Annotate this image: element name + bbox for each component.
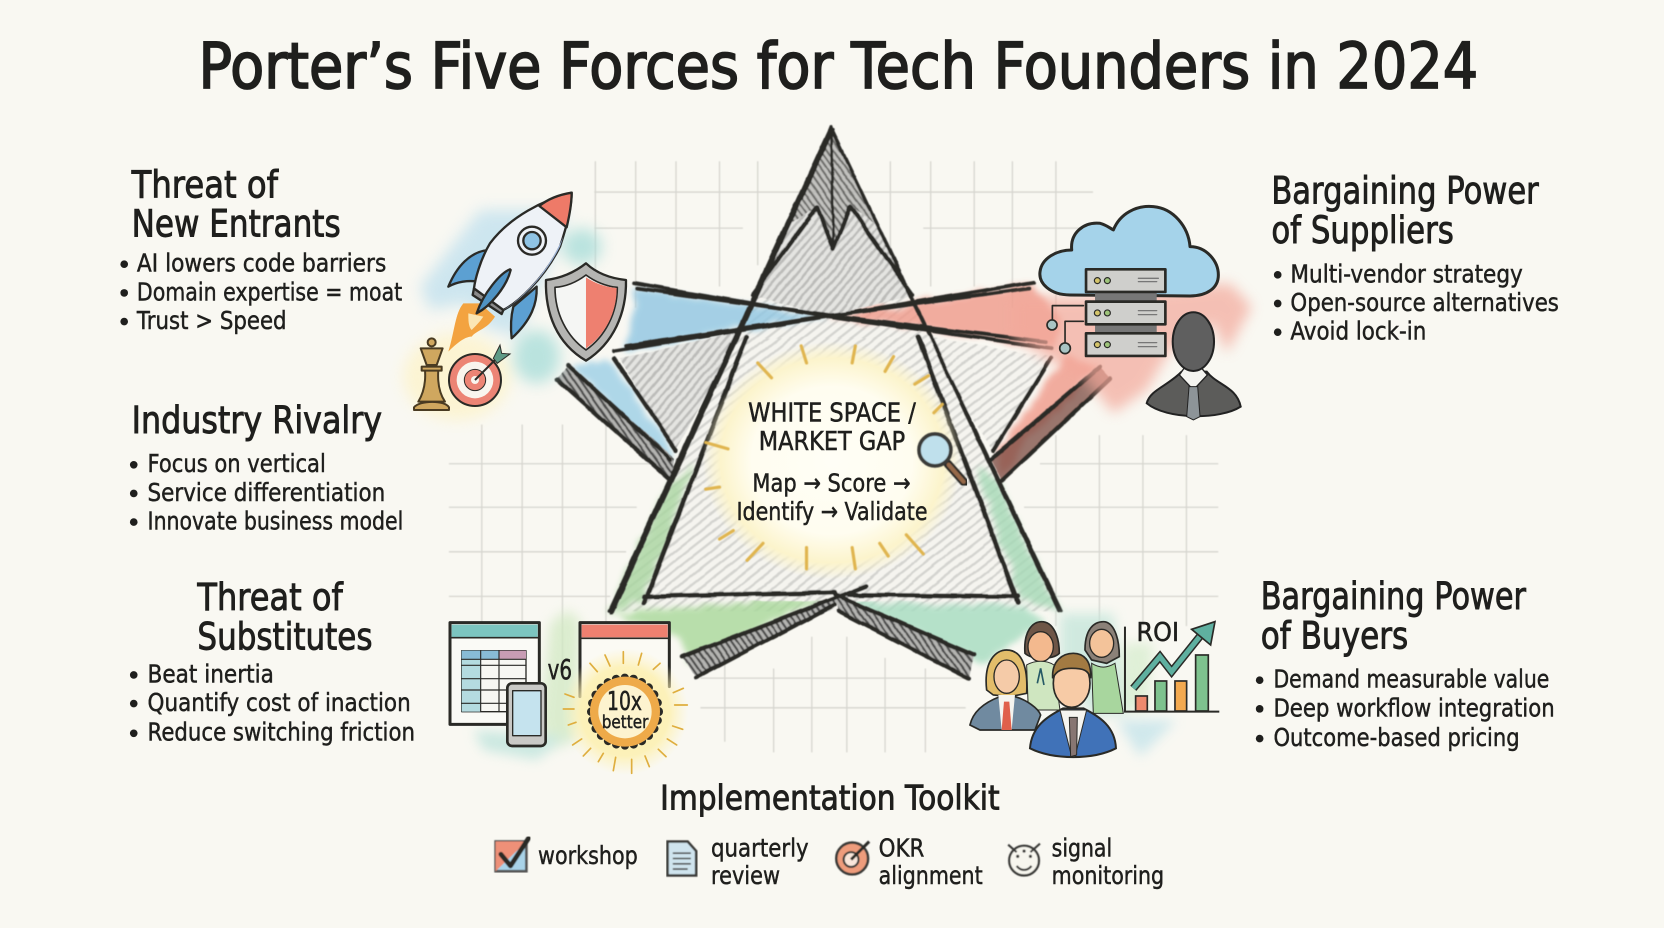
- bullet list: [130, 449, 403, 536]
- bullet list: Reduce switching friction: [148, 718, 415, 747]
- centre heading: MARKET GAP: [759, 427, 905, 457]
- icon: rocket: [448, 193, 572, 352]
- icon: document: [668, 842, 696, 875]
- icon cluster: buyers (team, ROI chart): [970, 613, 1219, 757]
- heading: [197, 576, 373, 658]
- heading: Industry Rivalry: [132, 399, 382, 442]
- heading: Threat of: [197, 576, 344, 619]
- heading: Bargaining Power: [1261, 575, 1527, 618]
- bullet list: Domain expertise = moat: [137, 277, 402, 306]
- back right woman: [1085, 622, 1123, 713]
- bullet list: Beat inertia: [148, 659, 274, 688]
- centre: white space / market gap: [703, 342, 965, 579]
- wash: [473, 610, 580, 760]
- panel: industry rivalry: [130, 399, 403, 536]
- heading: [1271, 170, 1539, 252]
- panel: threat of substitutes: [130, 576, 415, 747]
- bullet list: Open-source alternatives: [1290, 288, 1559, 317]
- icon: new product window: [580, 623, 669, 697]
- wash: [1060, 613, 1177, 757]
- title: Porter’s Five Forces for Tech Founders in 2024: [198, 30, 1478, 104]
- badge text: better: [602, 712, 649, 733]
- bullet list: Innovate business model: [148, 507, 403, 536]
- hatched star body: [557, 127, 1110, 678]
- item: workshop: workshop: [538, 841, 638, 870]
- bullet list: [1256, 665, 1555, 752]
- icon: server stack: [1047, 269, 1165, 356]
- heading: New Entrants: [132, 203, 341, 246]
- badge text: [602, 687, 649, 733]
- 10x badge glow: [562, 648, 688, 775]
- icon cluster: suppliers (cloud, servers, executive): [1013, 206, 1252, 420]
- icon: spreadsheet window: [450, 623, 539, 724]
- front man: [1030, 653, 1116, 757]
- bullet list: Service differentiation: [148, 478, 385, 507]
- bullet list: AI lowers code barriers: [137, 249, 386, 278]
- colour washes on the star arms: [573, 284, 1097, 663]
- heading: [1261, 575, 1527, 657]
- centre process steps: Map → Score →: [752, 468, 911, 497]
- bullet list: Outcome-based pricing: [1273, 723, 1520, 752]
- heading: Threat of: [131, 163, 279, 206]
- badge text: 10x: [607, 687, 642, 717]
- icon: target with arrow: [449, 345, 510, 406]
- bullet list: [130, 659, 415, 747]
- icon: cloud: [1040, 206, 1218, 296]
- heading: of Buyers: [1261, 614, 1408, 657]
- item: OKR alignment: alignment: [879, 861, 983, 890]
- badge rays: [563, 652, 687, 773]
- item: OKR alignment: [836, 833, 983, 890]
- badge: [590, 677, 660, 747]
- hatched band under the star: [609, 295, 1061, 611]
- item: quarterly review: quarterly: [711, 833, 809, 862]
- heading: [131, 163, 341, 246]
- centre process steps: Identify → Validate: [736, 497, 928, 526]
- item: OKR alignment: OKR: [879, 833, 924, 862]
- bullet list: Demand measurable value: [1273, 665, 1549, 694]
- icon cluster: new entrants (rocket, shield, chess king, target): [403, 193, 626, 420]
- panel: implementation toolkit: [496, 779, 1164, 890]
- bullet list: Avoid lock-in: [1290, 317, 1426, 346]
- centre heading: [748, 398, 916, 457]
- icon: checkbox: [496, 838, 529, 871]
- starburst rays: [706, 346, 942, 569]
- panel: threat of new entrants: [120, 163, 402, 335]
- bullet list: Deep workflow integration: [1273, 693, 1555, 722]
- icon cluster: substitutes (legacy spreadsheet, phone, 10x badge): [450, 610, 688, 775]
- item: quarterly review: [668, 833, 809, 890]
- front left woman: [970, 650, 1041, 730]
- panel: bargaining power of suppliers: [1271, 170, 1559, 346]
- icon: magnifying glass: [919, 434, 965, 483]
- icon: phone: [507, 683, 546, 746]
- five forces star diagram: [557, 127, 1110, 678]
- bullet list: Multi-vendor strategy: [1290, 259, 1523, 288]
- bullet list: Trust > Speed: [136, 306, 287, 335]
- icon: chess king: [414, 338, 449, 410]
- ROI label: ROI: [1137, 618, 1179, 648]
- icon: target: [836, 842, 869, 874]
- icon: shield: [546, 263, 626, 361]
- bullet list: Quantify cost of inaction: [148, 688, 411, 717]
- panel: bargaining power of buyers: [1256, 575, 1555, 752]
- back left woman: [1025, 622, 1060, 710]
- red wash: [1013, 283, 1252, 413]
- bullet list: [1274, 259, 1559, 346]
- watercolour wash: [403, 210, 602, 420]
- heading: Implementation Toolkit: [660, 779, 1000, 819]
- ROI bar chart: [1125, 622, 1219, 712]
- bullet list: Focus on vertical: [148, 449, 326, 478]
- v6 label: v6: [548, 653, 572, 686]
- item: quarterly review: review: [711, 861, 780, 890]
- icon: signal dial: [1008, 844, 1040, 875]
- bullet list: [120, 249, 402, 335]
- starburst glow: [703, 342, 961, 579]
- item: signal monitoring: [1008, 833, 1164, 890]
- centre heading: WHITE SPACE /: [748, 398, 916, 428]
- item: signal monitoring: signal: [1052, 833, 1112, 862]
- icon: executive silhouette: [1147, 312, 1241, 420]
- centre process steps: [736, 468, 928, 526]
- item: workshop: [496, 838, 638, 871]
- heading: Substitutes: [197, 615, 373, 658]
- item: signal monitoring: monitoring: [1052, 861, 1164, 890]
- heading: Bargaining Power: [1271, 170, 1539, 213]
- heading: of Suppliers: [1271, 209, 1454, 252]
